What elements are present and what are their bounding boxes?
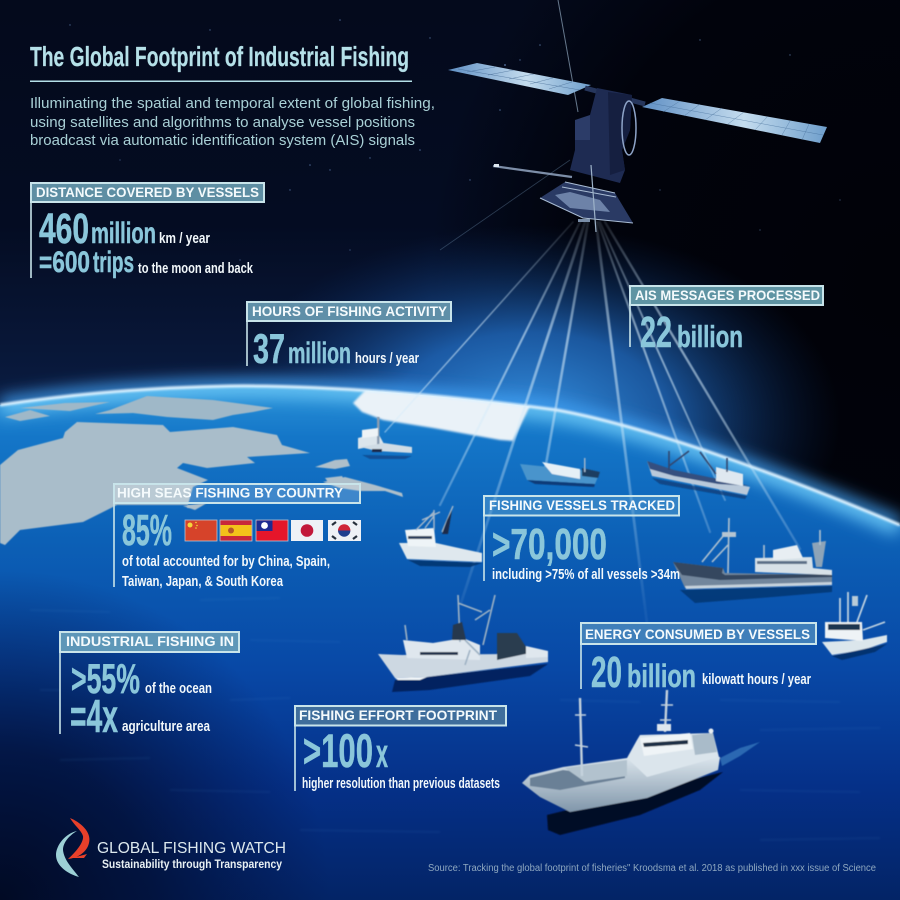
panel: high seas fishing by country: HIGH SEAS FISHING BY COUNTRY — [117, 486, 343, 500]
land: white northern coast — [352, 390, 530, 442]
panel: industrial fishing in: of the ocean — [145, 680, 212, 697]
panel: energy consumed by vessels: billion — [627, 658, 696, 694]
panel: AIS messages processed: billion — [677, 319, 743, 354]
logo: Global Fishing Watch: GLOBAL FISHING WATCH — [97, 840, 286, 857]
panel: AIS messages processed: AIS MESSAGES PROCESSED — [635, 288, 820, 303]
panel: fishing vessels tracked: >70,000 — [492, 520, 607, 569]
panel: hours of fishing activity: million — [288, 337, 351, 370]
ship: long dark-hulled vessel — [647, 451, 750, 499]
panel: distance covered by vessels: DISTANCE COVERED BY VESSELS — [36, 185, 259, 200]
satellite signal rays — [385, 222, 800, 623]
panel: high seas fishing by country — [114, 484, 361, 590]
subtitle text block: broadcast via automatic identification system (AIS) signals — [30, 133, 415, 149]
subtitle text block: Illuminating the spatial and temporal extent of global fishing, — [30, 96, 435, 112]
panel: fishing vessels tracked — [484, 496, 680, 583]
ship: blue trawler — [520, 458, 600, 487]
land: main continent — [0, 422, 310, 545]
panel: distance covered by vessels: 460 — [39, 205, 89, 253]
panel: hours of fishing activity: hours / year — [355, 350, 419, 367]
source note: Source: Tracking the global footprint of fisheries" Kroodsma et al. 2018 as published in xxx issue of Science — [428, 863, 876, 874]
panel: distance covered by vessels: km / year — [159, 230, 210, 247]
satellite — [440, 0, 827, 250]
subtitle text block — [30, 96, 435, 149]
subtitle text block: using satellites and algorithms to analyse vessel positions — [30, 115, 415, 131]
panel: high seas fishing by country: 85% — [122, 506, 172, 555]
panel: fishing vessels tracked: FISHING VESSELS TRACKED — [489, 498, 675, 513]
solar panel: left — [448, 63, 591, 95]
panel: fishing effort footprint — [295, 706, 506, 792]
ocean streaks — [30, 598, 880, 840]
flag: Taiwan — [256, 520, 288, 541]
panel: fishing effort footprint: FISHING EFFORT FOOTPRINT — [299, 708, 498, 723]
panel: industrial fishing in: INDUSTRIAL FISHING IN — [66, 634, 234, 649]
panel: distance covered by vessels: =600 — [39, 246, 90, 279]
flag: China — [185, 520, 217, 541]
ship: small white boat right — [822, 592, 887, 660]
panel: high seas fishing by country: Taiwan, Japan, & South Korea — [122, 573, 283, 590]
panel: AIS messages processed: 22 — [640, 308, 672, 357]
panel: industrial fishing in: >55% — [71, 655, 140, 702]
solar panel: right — [642, 98, 827, 143]
panel: energy consumed by vessels: kilowatt hours / year — [702, 671, 811, 688]
panel: fishing effort footprint: x — [376, 732, 388, 776]
panel: distance covered by vessels: to the moon and back — [138, 260, 253, 277]
panel: AIS messages processed — [630, 286, 823, 357]
ship: mid trawler with nets — [378, 595, 548, 692]
panel: fishing vessels tracked: including >75% of all vessels >34m — [492, 566, 680, 583]
ship: large stern trawler — [673, 518, 832, 603]
panel: industrial fishing in — [60, 632, 239, 742]
flag: Japan — [291, 520, 323, 541]
panel: industrial fishing in: =4x — [70, 690, 118, 742]
panel: energy consumed by vessels: 20 — [591, 648, 622, 697]
logo: Global Fishing Watch — [56, 818, 286, 877]
panel: distance covered by vessels: trips — [93, 246, 134, 279]
ship: far left near coast — [358, 417, 412, 459]
land: northern pieces — [5, 396, 273, 421]
panel: hours of fishing activity: HOURS OF FISHING ACTIVITY — [252, 304, 447, 319]
globe: ocean and land — [0, 380, 900, 900]
icon: koi fish logo — [56, 818, 89, 877]
land: islands — [183, 459, 403, 510]
flag: South Korea — [328, 520, 361, 541]
panel: energy consumed by vessels: ENERGY CONSUMED BY VESSELS — [585, 627, 810, 642]
panel: high seas fishing by country: of total accounted for by China, Spain, — [122, 553, 330, 570]
panel: fishing effort footprint: higher resolution than previous datasets — [302, 775, 500, 792]
panel: hours of fishing activity — [247, 302, 451, 372]
flag: Spain — [220, 520, 252, 541]
logo: Global Fishing Watch: Sustainability through Transparency — [102, 857, 282, 871]
ship: large research vessel foreground — [522, 690, 760, 835]
panel: distance covered by vessels — [31, 183, 264, 279]
panel: fishing effort footprint: >100 — [303, 724, 373, 777]
ship: white trawler left — [399, 506, 482, 567]
panel: industrial fishing in: agriculture area — [122, 718, 211, 735]
panel: hours of fishing activity: 37 — [253, 325, 285, 372]
panel: energy consumed by vessels — [581, 623, 816, 697]
panel: distance covered by vessels: million — [91, 217, 156, 250]
title: The Global Footprint of Industrial Fishing — [30, 41, 409, 72]
